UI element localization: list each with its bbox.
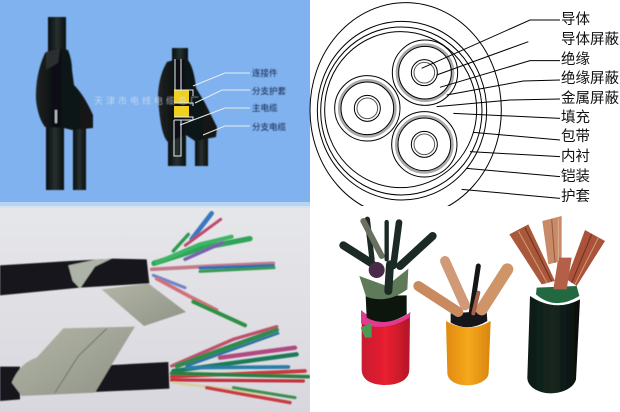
watermark text: 天津市电线电缆总厂 (94, 95, 202, 106)
icon: black cable (509, 216, 605, 393)
upper wires (152, 213, 274, 325)
labels: joint parts (252, 68, 287, 132)
labels: cable layers: 内衬 (561, 148, 590, 165)
leader lines (422, 20, 560, 198)
labels: joint parts: 分支护套 (252, 86, 287, 96)
cutaway outline and leader lines (174, 59, 250, 156)
labels: cable layers: 绝缘屏蔽 (561, 70, 619, 87)
labels: joint parts: 主电缆 (252, 103, 278, 113)
labels: cable layers: 铠装 (561, 168, 590, 185)
labels: cable layers: 绝缘 (561, 51, 590, 68)
labels: cable layers: 导体屏蔽 (561, 31, 619, 48)
panel: cable cross-section diagram (310, 0, 620, 217)
icon: branch cable cutaway (158, 48, 250, 166)
labels: cable layers: 填充 (561, 109, 590, 126)
upper cable (0, 259, 186, 326)
icon: orange cable (418, 261, 507, 385)
copper bundles (509, 216, 605, 289)
yellow connector blocks (174, 90, 189, 117)
icon: whole branch cable (36, 17, 93, 190)
core: left (335, 76, 400, 141)
lower wires (172, 327, 308, 403)
panel: armoured multi-core cable photo (0, 206, 310, 412)
labels: cable layers: 包带 (561, 128, 590, 145)
labels: cable layers: 护套 (561, 188, 590, 205)
labels: cable layers (561, 11, 619, 205)
core: upper (392, 40, 458, 105)
labels: cable layers: 导体 (561, 11, 590, 28)
core: lower (392, 112, 457, 177)
cross-section rings (310, 3, 560, 217)
labels: cable layers: 金属屏蔽 (561, 90, 619, 107)
panel: rubber power cables photo (310, 206, 620, 412)
labels: joint parts: 连接件 (252, 68, 278, 78)
panel: branch cable joint photo (0, 0, 310, 206)
lower cable (0, 327, 169, 401)
icon: red cable (343, 219, 433, 385)
labels: joint parts: 分支电缆 (252, 122, 287, 132)
